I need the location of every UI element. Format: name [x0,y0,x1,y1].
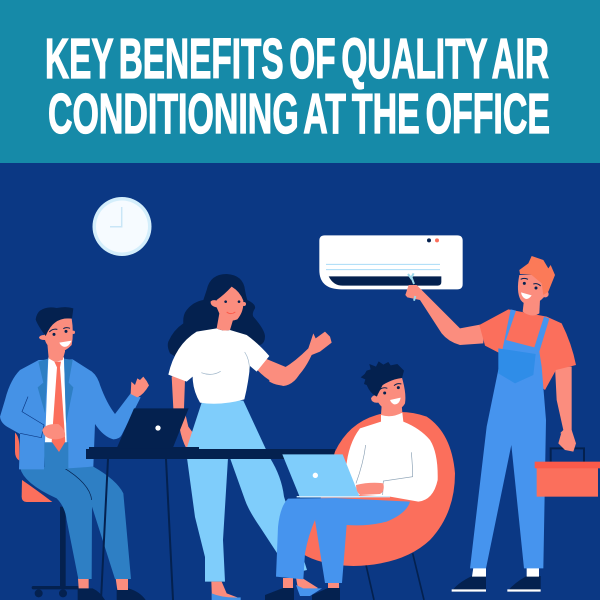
neck and head [217,313,235,331]
shirt [45,357,67,442]
arm down [555,367,572,433]
hair [168,274,265,363]
desk [86,447,335,600]
hand [356,483,384,495]
illustration background [0,163,600,600]
trousers [187,400,307,582]
icon: wall clock [92,197,152,256]
hair [519,256,555,295]
hand on toolbox handle [558,430,576,452]
face [52,333,55,336]
hands [42,424,65,439]
woman foot and shoe [295,572,318,591]
lapels [38,359,73,423]
armchair [302,412,455,566]
raised arm [405,285,483,345]
title banner [0,0,600,163]
laptop [282,454,360,498]
figure: technician in overalls [405,256,600,592]
desk legs [101,459,173,600]
face [224,300,227,303]
trousers right leg [315,498,410,583]
hair [361,361,404,397]
shoes [452,576,541,592]
jacket sleeve lines [20,397,44,438]
chair legs [366,553,424,600]
face [523,282,526,285]
overalls [470,309,549,568]
chair [15,433,79,597]
trousers left leg [276,498,337,579]
shoes [78,588,146,600]
woman arm left [172,376,203,449]
ankles [78,578,128,590]
toolbox [535,448,600,497]
figure: woman standing [168,274,307,600]
foot [211,582,240,600]
figure: man seated in armchair [265,361,455,600]
blouse [168,328,269,404]
neck and head [381,405,402,416]
neck and head [523,300,540,315]
woman hand raised [269,332,332,385]
neck and head [47,343,65,362]
air conditioner unit [319,235,463,289]
sweater [346,413,438,502]
hair [36,307,73,336]
trousers [20,467,131,579]
jacket [0,359,141,469]
orange shirt [479,309,576,390]
face [383,391,386,394]
shoes [265,588,340,600]
laptop dark [117,408,189,448]
figure: businessman on chair [0,307,149,600]
icon: wrench [408,273,415,301]
tie [52,362,65,452]
woman arm right [257,358,300,386]
